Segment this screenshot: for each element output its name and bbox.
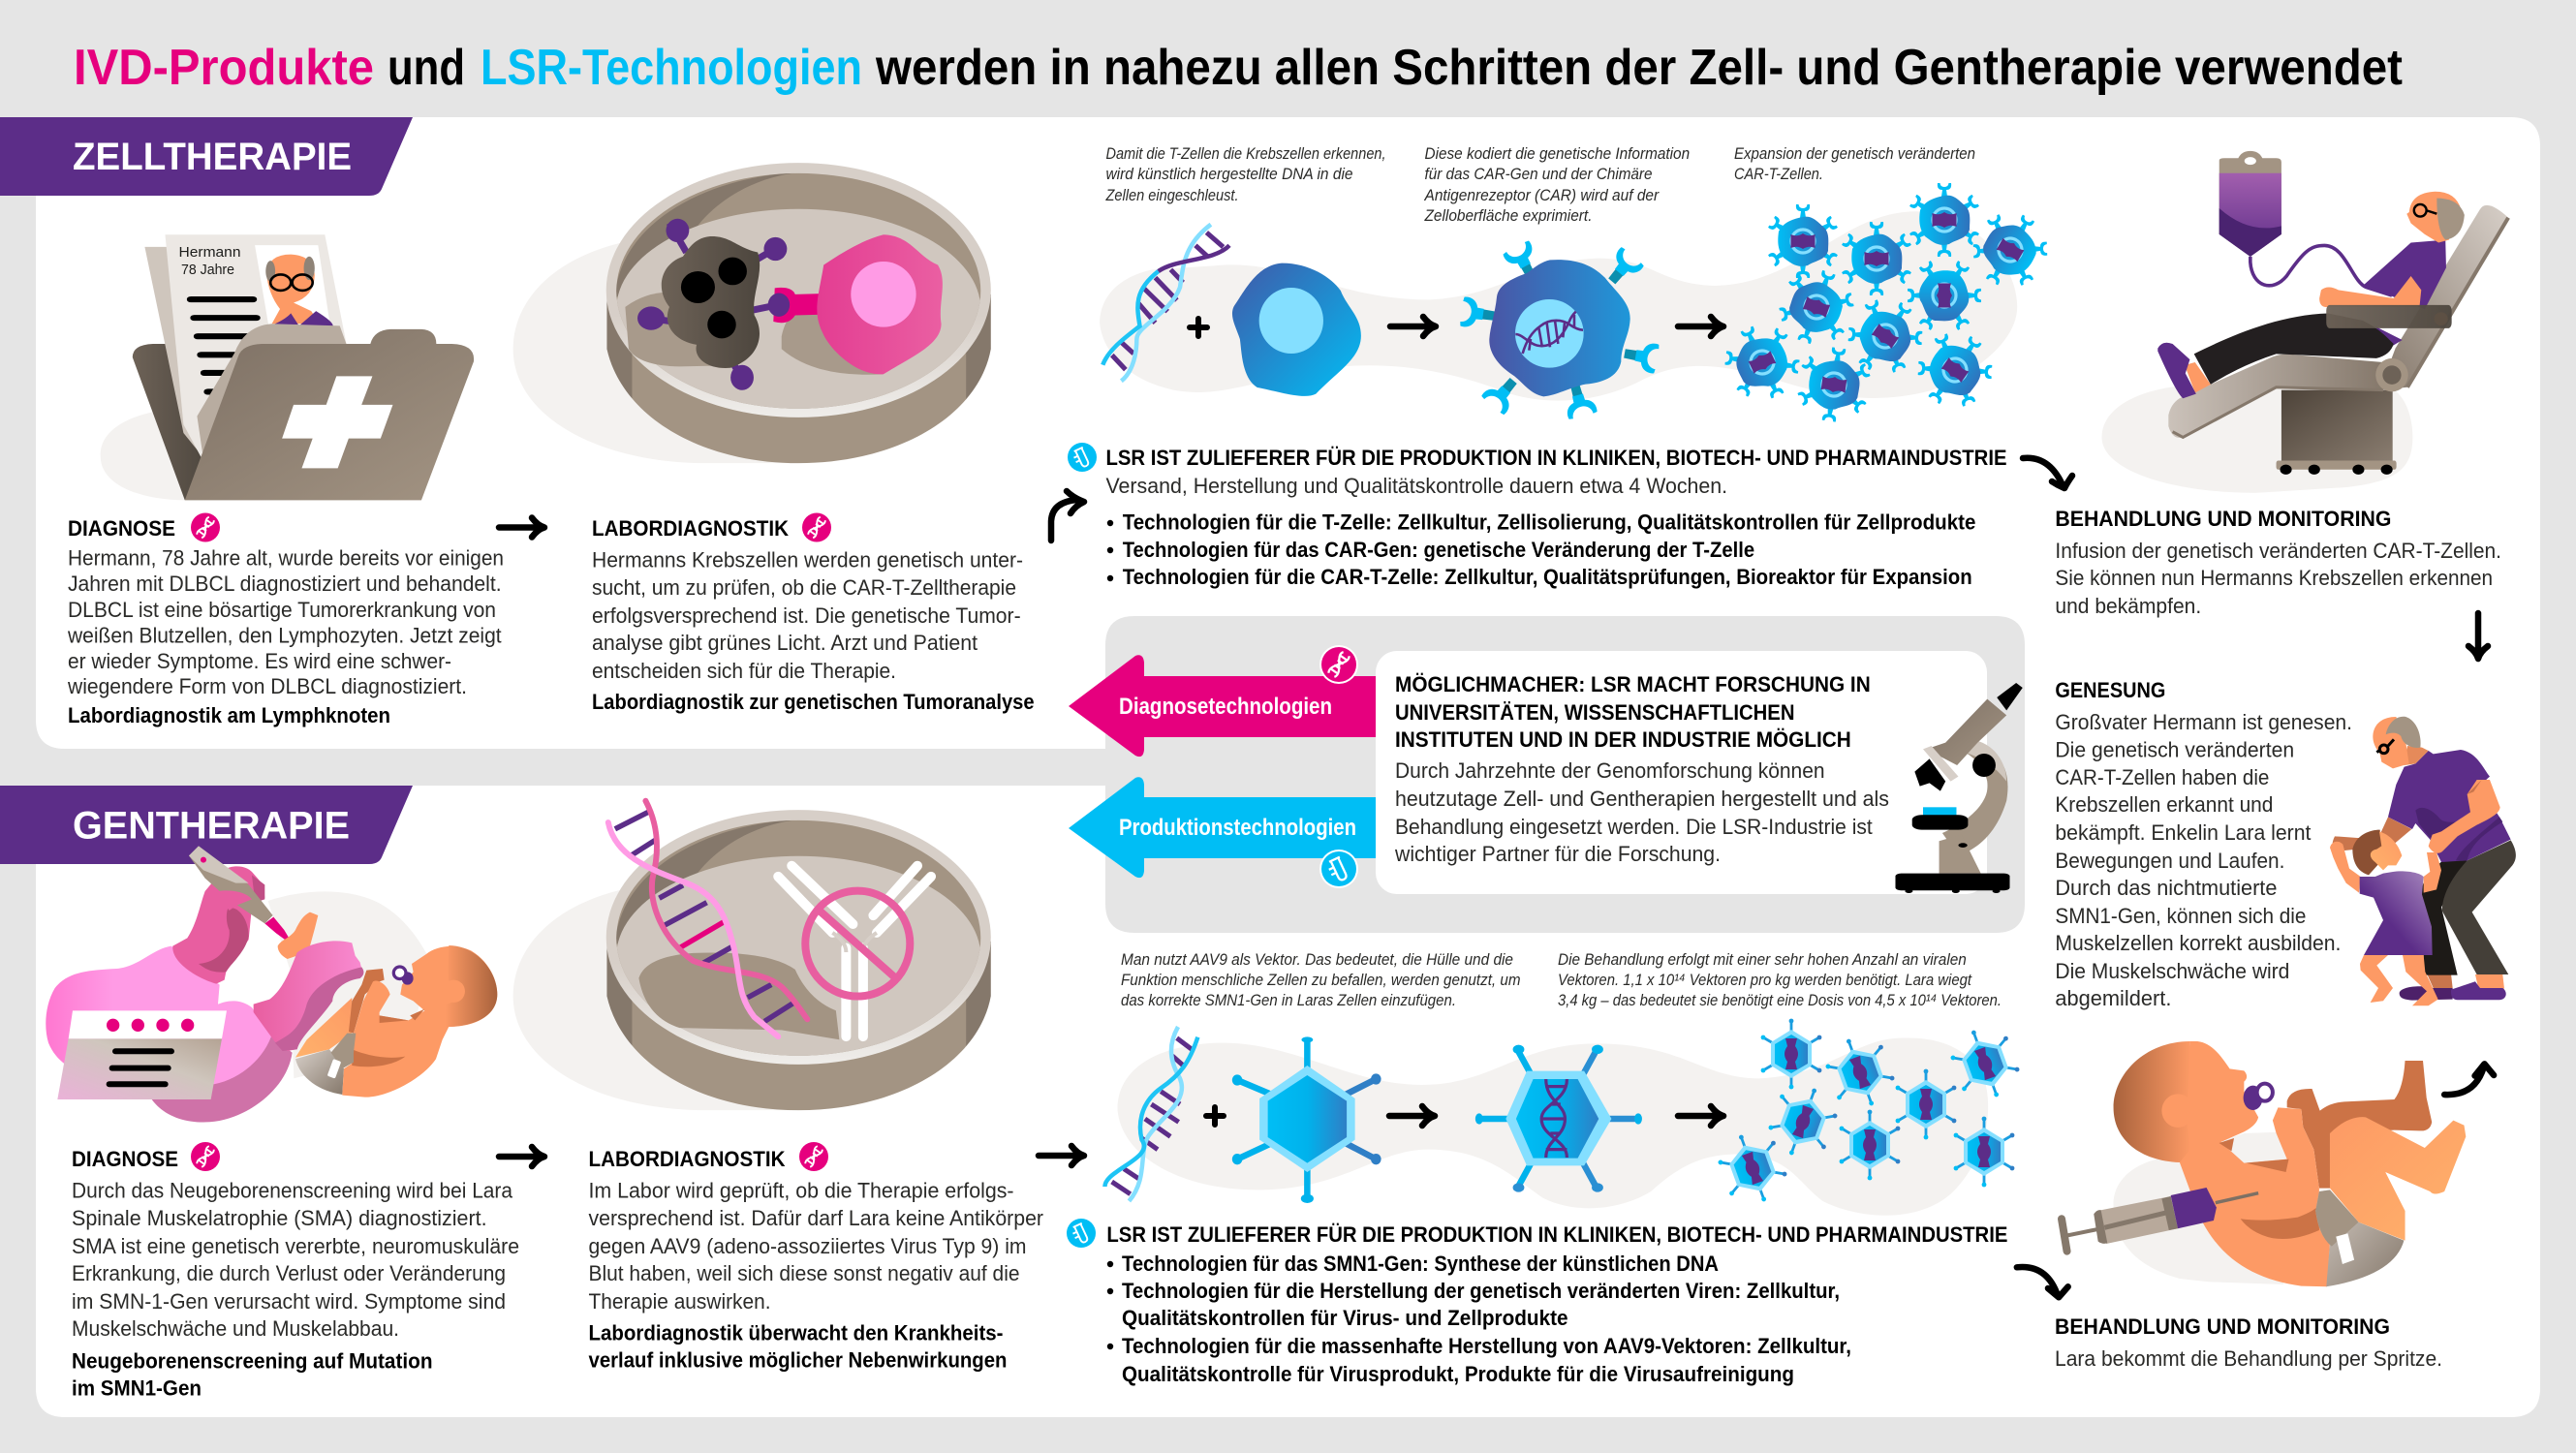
captions: CAR-T process: Antigenrezeptor (CAR) wird auf der [1424,187,1660,204]
text: Genesung: SMN1-Gen, können sich die [2055,904,2306,928]
text: Möglichmacher: INSTITUTEN UND IN DER INDUSTRIE MÖGLICH [1395,727,1851,752]
icon: plus [1190,319,1207,336]
text: Diagnose Gentherapie: Spinale Muskelatrophie (SMA) diagnostiziert. [72,1206,487,1230]
text: Diagnose Gentherapie [72,1142,519,1401]
text: Diagnose Zelltherapie: Labordiagnostik am Lymphknoten [68,703,390,727]
icon: newborn screening [46,846,497,1123]
captions: CAR-T process: CAR-T-Zellen. [1734,166,1823,183]
text: Möglichmacher: Behandlung eingesetzt werden. Die LSR-Industrie ist [1395,815,1873,839]
text: Diagnose Zelltherapie: DLBCL ist eine bösartige Tumorerkrankung von [68,598,496,622]
title: und [388,40,465,96]
icon: DNA strand [1104,1027,1197,1201]
text: Labordiagnostik Zelltherapie: analyse gibt grünes Licht. Arzt und Patient [592,631,978,655]
captions: CAR-T process [1105,145,1975,225]
text: Behandlung Gentherapie [2055,1314,2442,1371]
folder label text: Hermann [178,244,240,261]
captions: gene therapy: Funktion menschliche Zellen zu befallen, werden genutzt, um [1121,972,1521,989]
banner: Gentherapie [0,786,413,864]
background blob [1118,1037,1988,1216]
arrow [1678,317,1723,336]
icon: petri dish with antibody [513,810,991,1110]
text: LSR supplier Gentherapie: Qualitätskontrollen für Virus- und Zellprodukte [1122,1306,1568,1330]
text: Möglichmacher: wichtiger Partner für die Forschung. [1394,842,1721,866]
arrow: Produktionstechnologien: Produktionstechnologien [1119,815,1356,841]
text: Labordiagnostik Zelltherapie: Hermanns Krebszellen werden genetisch unter- [592,548,1023,572]
text: Diagnose Zelltherapie [67,513,504,727]
text: Labordiagnostik Gentherapie: Therapie auswirken. [589,1289,771,1314]
arrow [499,1147,544,1166]
icon: grandfather and granddaughter [2330,717,2516,1005]
icon: IVD badge [802,513,831,542]
text: Behandlung Zelltherapie [2055,507,2501,618]
text: Behandlung Zelltherapie: und bekämpfen. [2055,594,2201,618]
captions: gene therapy: Man nutzt AAV9 als Vektor. Das bedeutet, die Hülle und die [1121,951,1513,969]
title: LSR-Technologien [481,40,862,96]
icon: LSR badge [1068,443,1097,472]
text: Labordiagnostik Zelltherapie: Labordiagnostik zur genetischen Tumoranalyse [592,690,1035,714]
text: Genesung: CAR-T-Zellen haben die [2055,765,2269,789]
text: LSR supplier Zelltherapie: Versand, Herstellung und Qualitätskontrolle dauern etwa 4 Wochen. [1106,474,1727,498]
text: Genesung: Großvater Hermann ist genesen. [2055,710,2352,734]
text: LSR supplier Gentherapie: LSR IST ZULIEFERER FÜR DIE PRODUKTION IN KLINIKEN, BIOTECH- UND PHARMAINDUSTRIE [1106,1222,2007,1247]
icon: expanded vectors [1712,1019,2026,1212]
captions: CAR-T process: Zelloberfläche exprimiert. [1424,207,1593,225]
text: Diagnose Zelltherapie: er wieder Symptome. Es wird eine schwer- [68,649,451,673]
text: LSR supplier Zelltherapie: Technologien für die CAR-T-Zelle: Zellkultur, Qualitätsprüfungen, Bioreaktor für Expansion [1123,565,1972,589]
icon: CAR-T cell [1460,240,1660,419]
icon: baby with syringe [2062,1041,2466,1286]
text: LSR supplier Zelltherapie [1068,443,2007,589]
text: Diagnose Gentherapie: Durch das Neugeborenenscreening wird bei Lara [72,1178,512,1203]
icon: IVD badge [1319,645,1358,684]
text: LSR supplier Gentherapie: Technologien für die massenhafte Herstellung von AAV9-Vektoren: Zellkultur, [1122,1334,1851,1358]
icon: AAV9 capsid with gene [1475,1045,1642,1192]
arrow: Diagnosetechnologien [1069,655,1376,757]
text: Labordiagnostik Gentherapie: verlauf inklusive möglicher Nebenwirkungen [589,1348,1008,1372]
arrow: down [2468,613,2488,659]
arrow [499,517,544,537]
icon: IVD badge [191,1142,220,1171]
text: LSR supplier Zelltherapie: LSR IST ZULIEFERER FÜR DIE PRODUKTION IN KLINIKEN, BIOTECH- UND PHARMAINDUSTRIE [1106,446,2007,470]
title: werden in nahezu allen Schritten der Zell- und Gentherapie verwendet [875,40,2403,96]
text: LSR supplier Zelltherapie: Technologien für das CAR-Gen: genetische Veränderung der T-Zelle [1123,538,1754,562]
icon: microscope [1895,683,2023,893]
icon: patient in infusion chair [2102,151,2508,493]
text: Diagnose Zelltherapie: Jahren mit DLBCL diagnostiziert und behandelt. [68,572,502,596]
text: Diagnose Zelltherapie: DIAGNOSE [68,516,175,541]
captions: gene therapy: Die Behandlung erfolgt mit einer sehr hohen Anzahl an viralen [1558,951,1967,969]
captions: gene therapy [1121,951,2002,1009]
text: Labordiagnostik Gentherapie: LABORDIAGNOSTIK [589,1147,786,1171]
banner: Zelltherapie [0,117,413,196]
text: Genesung: Bewegungen und Laufen. [2055,849,2284,873]
arrow [1390,317,1436,336]
diagram: CAR-T cell production [1100,183,2059,426]
text: Labordiagnostik Zelltherapie: entscheiden sich für die Therapie. [592,659,896,683]
text: Diagnose Gentherapie: DIAGNOSE [72,1147,178,1171]
arrow: curved down [2023,458,2072,488]
text: Möglichmacher: UNIVERSITÄTEN, WISSENSCHAFTLICHEN [1395,700,1794,725]
text: Diagnose Gentherapie: SMA ist eine genetisch vererbte, neuromuskuläre [72,1234,519,1258]
folder label text: 78 Jahre [181,262,234,278]
icon: T cell [1232,263,1361,396]
captions: CAR-T process: wird künstlich hergestellte DNA in die [1106,166,1352,183]
captions: CAR-T process: Diese kodiert die genetische Information [1424,145,1690,163]
icon: plus [1206,1107,1224,1125]
icon: IVD badge [799,1142,828,1171]
text: Diagnose Zelltherapie: wiegendere Form von DLBCL diagnostiziert. [67,674,467,698]
text: Behandlung Zelltherapie: BEHANDLUNG UND MONITORING [2055,507,2391,531]
captions: CAR-T process: Damit die T-Zellen die Krebszellen erkennen, [1106,145,1385,163]
icon: patient folder [101,234,474,500]
captions: CAR-T process: Zellen eingeschleust. [1105,187,1238,204]
text: Labordiagnostik Zelltherapie: LABORDIAGNOSTIK [592,516,789,541]
captions: CAR-T process: Expansion der genetisch veränderten [1734,145,1975,163]
text: Genesung: GENESUNG [2055,678,2165,702]
text: Genesung: bekämpft. Enkelin Lara lernt [2055,820,2312,845]
icon: expanded CAR-T cells [1715,183,2059,426]
text: Genesung: abgemildert. [2055,986,2171,1010]
icon: IVD badge [191,513,220,542]
title [74,40,2403,96]
text: Labordiagnostik Gentherapie: Im Labor wird geprüft, ob die Therapie erfolgs- [589,1178,1013,1203]
text: Behandlung Zelltherapie: Sie können nun Hermanns Krebszellen erkennen [2055,566,2493,590]
text: Behandlung Gentherapie: BEHANDLUNG UND MONITORING [2055,1314,2390,1339]
text: Möglichmacher: MÖGLICHMACHER: LSR MACHT FORSCHUNG IN [1395,672,1871,696]
text: Diagnose Gentherapie: Neugeborenenscreening auf Mutation [72,1348,432,1374]
captions: CAR-T process: für das CAR-Gen und der Chimäre [1424,166,1653,183]
icon: AAV9 capsid [1232,1036,1381,1203]
text: Behandlung Zelltherapie: Infusion der genetisch veränderten CAR-T-Zellen. [2055,539,2501,563]
diagram: AAV9 vector production [1104,1019,2026,1216]
arrow: curved down [2017,1267,2068,1297]
text: Genesung: Die genetisch veränderten [2055,738,2294,761]
icon: LSR badge [1067,1219,1096,1248]
text: Genesung: Die Muskelschwäche wird [2055,959,2289,983]
text: Labordiagnostik Gentherapie: Blut haben, weil sich diese sonst negativ auf die [589,1261,1019,1285]
text: Genesung: Muskelzellen korrekt ausbilden. [2055,931,2341,955]
text: Diagnose Gentherapie: Muskelschwäche und Muskelabbau. [72,1316,399,1341]
text: Diagnose Zelltherapie: weißen Blutzellen, den Lymphozyten. Jetzt zeigt [67,624,502,647]
arrow [1678,1106,1723,1126]
text: LSR supplier Gentherapie: Technologien für das SMN1-Gen: Synthese der künstlichen DNA [1122,1252,1719,1276]
text: Möglichmacher: heutzutage Zell- und Gentherapien hergestellt und als [1395,787,1889,811]
text: Diagnose Gentherapie: im SMN1-Gen [72,1376,202,1401]
banner: Zelltherapie: ZELLTHERAPIE [73,136,352,178]
text: Labordiagnostik Zelltherapie: sucht, um zu prüfen, ob die CAR-T-Zelltherapie [592,575,1016,600]
text: Diagnose Gentherapie: im SMN-1-Gen verursacht wird. Symptome sind [72,1289,506,1314]
folder label text [178,244,240,278]
arrow: curved up-right [2444,1064,2494,1095]
text: Diagnose Zelltherapie: Hermann, 78 Jahre alt, wurde bereits vor einigen [68,546,504,570]
arrow: Produktionstechnologien [1069,777,1376,878]
text: Labordiagnostik Zelltherapie [592,513,1035,714]
captions: gene therapy: das korrekte SMN1-Gen in Laras Zellen einzufügen. [1121,992,1456,1009]
text: Genesung: Durch das nichtmutierte [2055,876,2277,900]
text: Möglichmacher: Durch Jahrzehnte der Genomforschung können [1395,758,1825,783]
text: Labordiagnostik Gentherapie: gegen AAV9 (adeno-assoziiertes Virus Typ 9) im [589,1234,1027,1258]
text: LSR supplier Gentherapie: Qualitätskontrolle für Virusprodukt, Produkte für die Virusaufreinigung [1122,1362,1794,1386]
text: Diagnose Gentherapie: Erkrankung, die durch Verlust oder Veränderung [72,1261,506,1285]
arrow: curved up [1051,491,1084,541]
text: LSR supplier Zelltherapie: Technologien für die T-Zelle: Zellkultur, Zellisolierung, Qualitätskontrollen für Zellprodukte [1123,510,1975,535]
captions: gene therapy: Vektoren. 1,1 x 10¹⁴ Vektoren pro kg werden benötigt. Lara wiegt [1558,972,1972,989]
icon: DNA strand [1102,225,1229,381]
text: Labordiagnostik Gentherapie: Labordiagnostik überwacht den Krankheits- [589,1321,1004,1345]
text: Behandlung Gentherapie: Lara bekommt die Behandlung per Spritze. [2055,1346,2442,1371]
panel: enabler [1046,616,2025,933]
arrow [1389,1106,1435,1126]
title: IVD-Produkte [74,40,374,96]
captions: gene therapy: 3,4 kg – das bedeutet sie benötigt eine Dosis von 4,5 x 10¹⁴ Vektoren. [1558,992,2002,1009]
icon: petri dish with tumour cell [513,163,991,463]
text: Genesung [2055,678,2352,1010]
icon: DNA and blocked antibody [608,801,931,1039]
text: Genesung: Krebszellen erkannt und [2055,792,2273,817]
arrow: Diagnosetechnologien: Diagnosetechnologien [1119,694,1332,720]
text: LSR supplier Gentherapie: Technologien für die Herstellung der genetisch veränderten Viren: Zellkultur, [1122,1279,1840,1303]
text: Möglichmacher [1394,672,1889,866]
text: Labordiagnostik Gentherapie: versprechend ist. Dafür darf Lara keine Antikörper [589,1206,1043,1230]
background blob [1100,211,2017,401]
text: Labordiagnostik Zelltherapie: erfolgsversprechend ist. Die genetische Tumor- [592,603,1021,628]
icon: LSR badge [1319,850,1358,888]
text: Labordiagnostik Gentherapie [589,1142,1043,1372]
text: LSR supplier Gentherapie [1067,1219,2007,1386]
arrow [1039,1146,1084,1165]
banner: Gentherapie: GENTHERAPIE [73,804,350,847]
